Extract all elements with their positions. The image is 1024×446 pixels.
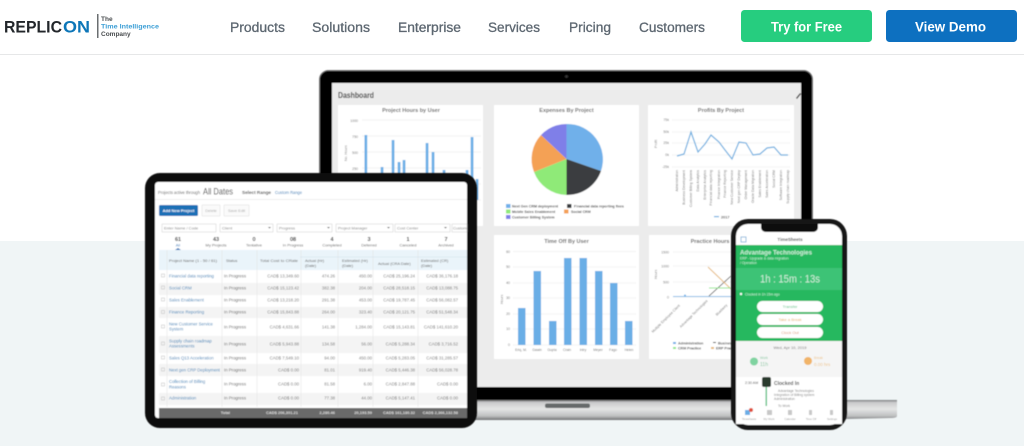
tablet status tabs: Deferred xyxy=(361,242,377,248)
project table: Total Cost to CRate xyxy=(260,258,299,263)
project table: 1,284.00 xyxy=(355,324,373,330)
phone daily summary: Wed, Apr 10, 2019 xyxy=(773,345,807,350)
panel: practice hours: Blueberry xyxy=(715,303,728,317)
panel: practice hours: CRM Practice xyxy=(678,346,701,350)
logo: ON xyxy=(63,18,90,36)
panel: profits by project: Enterprise Analytics xyxy=(703,170,707,200)
project table: Financial data reporting xyxy=(169,274,215,278)
phone daily summary: Break xyxy=(814,356,823,360)
project table: 291.38 xyxy=(322,298,336,302)
project table: 323.40 xyxy=(359,310,373,314)
tablet toolbar buttons xyxy=(159,205,249,216)
panel: practice hours: 500 xyxy=(663,280,669,284)
project table: 382.38 xyxy=(322,286,336,290)
project table: CAD$ 2,847.88 xyxy=(386,382,416,386)
laptop base xyxy=(440,400,897,420)
project table: CAD$ 0.00 xyxy=(437,382,459,386)
pie legend: Mobile Sales Enablement xyxy=(512,210,556,214)
project table: CAD$ 13,349.60 xyxy=(267,274,300,278)
project table: Estimated (Hr) xyxy=(342,258,368,263)
navigation: Products xyxy=(230,20,285,35)
project table: CAD$ 15,843.88 xyxy=(267,310,300,314)
button: view demo: View Demo xyxy=(915,20,986,34)
tablet: Custom xyxy=(453,226,467,230)
project table: In Progress xyxy=(224,286,246,290)
panel: profits by project: Profits By Project xyxy=(698,108,744,114)
dashboard heading: Dashboard xyxy=(338,91,374,100)
panel: profits by project: Finance Integration xyxy=(717,170,721,199)
panel: practice hours: Administration xyxy=(678,342,703,346)
panel: time off by user: Fago xyxy=(609,348,617,352)
phone tab bar: Time Off xyxy=(806,417,817,421)
project table: CAD$ 5,147.41 xyxy=(386,396,416,400)
panel: project hours by user: 1000 xyxy=(350,119,358,123)
tablet status tabs: All xyxy=(176,242,180,248)
panel: profits by project: Customer Billing System xyxy=(689,170,693,207)
panel: practice hours: 1500 xyxy=(661,250,669,254)
project table: Actual (CRA Date) xyxy=(378,261,411,266)
tablet toolbar buttons: Save Edit xyxy=(228,208,246,213)
project table: Social CRM xyxy=(169,286,192,290)
project table: CAD$ 31,285.57 xyxy=(426,356,459,360)
project table: In Progress xyxy=(224,310,246,314)
panel: expenses by project: Expenses By Project xyxy=(539,108,594,114)
phone daily summary xyxy=(736,341,842,377)
panel: profits by project: Order Management xyxy=(744,170,748,199)
phone activity entry xyxy=(745,377,815,408)
panel: profits by project: 0k xyxy=(665,153,669,157)
project table: Actual (Hr) xyxy=(305,258,325,263)
panel: practice hours xyxy=(649,235,801,359)
panel: practice hours: Multiple Employee Client xyxy=(651,304,681,334)
panel: profits by project: Financial data reporting xyxy=(709,170,713,205)
logo: The xyxy=(101,16,113,23)
tablet status tabs: 43 xyxy=(213,237,219,243)
tablet status tabs: In Progress xyxy=(283,242,303,248)
phone tab bar: Timesheets xyxy=(742,417,757,421)
project table: CAD$ 28,518.15 xyxy=(383,286,416,290)
project table: 81.01 xyxy=(324,368,336,372)
panel: time off by user: Eriq, M. xyxy=(515,348,527,352)
tablet filters xyxy=(162,224,467,232)
project table: Administration xyxy=(169,396,197,400)
tablet status tabs: Tentative xyxy=(246,242,263,248)
phone xyxy=(731,219,847,430)
project table: CAD$ 7,549.10 xyxy=(270,356,300,360)
project table: 77.38 xyxy=(324,396,336,400)
phone activity entry: Integration of Billing system xyxy=(774,393,815,397)
panel: profits by project: Administration xyxy=(675,170,679,191)
pencil icon xyxy=(796,93,801,99)
panel: practice hours: Hours xyxy=(654,269,658,279)
panel: profits by project: Social CRM xyxy=(772,170,776,188)
panel: profits by project: New Customer Service xyxy=(730,170,734,205)
phone daily summary: Work xyxy=(760,356,768,360)
button: try for free: Try for Free xyxy=(771,20,842,34)
panel: time off by user: 60 xyxy=(506,250,510,254)
phone tab bar: Calendar xyxy=(784,417,796,421)
table total row: CAD$ 161,180.32 xyxy=(383,410,416,415)
project table: Sales Enablement xyxy=(169,298,205,302)
phone green timer panel: Advantage Technologies xyxy=(740,250,812,256)
project table: Supply chain roadmap xyxy=(169,338,212,344)
panel: time off by user: 50 xyxy=(506,265,510,269)
panel: practice hours: Business xyxy=(718,342,734,346)
phone daily summary: 11h xyxy=(760,362,768,368)
project table: 141.38 xyxy=(322,324,336,330)
tablet status tabs: 3 xyxy=(367,237,371,243)
tablet status tabs: Canceled xyxy=(400,242,416,248)
panel: time off by user: Intry xyxy=(580,348,587,352)
project table: CAD$ 0.00 xyxy=(437,396,459,400)
project table: CAD$ 141,610.20 xyxy=(424,324,459,330)
laptop lid xyxy=(320,70,812,400)
tablet: Enter Name / Code xyxy=(164,226,199,230)
project table: CAD$ 56,082.57 xyxy=(426,298,459,302)
project table: 6.00 xyxy=(364,382,373,386)
project table: 264.00 xyxy=(322,310,336,314)
panel: project hours by user: 750 xyxy=(352,135,358,139)
project table: CAD$ 36,176.18 xyxy=(426,274,459,278)
project table: Status xyxy=(226,258,237,263)
project table: 474.26 xyxy=(322,274,336,278)
project table: Estimated (CR) xyxy=(421,258,449,263)
project table: 453.00 xyxy=(359,298,373,302)
panel: time off by user: 40 xyxy=(506,281,510,285)
tablet: Client xyxy=(222,226,233,230)
project table: Project Name (1 - 50 / 61) xyxy=(169,258,218,263)
panel: project hours by user: 500 xyxy=(352,151,358,155)
logo: Company xyxy=(101,31,131,38)
panel: profits by project: Next gen CRP Deploy xyxy=(737,170,741,203)
project table: CAD$ 51,548.34 xyxy=(426,310,459,314)
navigation: Enterprise xyxy=(398,20,461,35)
panel: profits by project: Profit xyxy=(654,140,658,148)
header bar xyxy=(0,0,1024,55)
tablet: Cost Center xyxy=(397,226,419,230)
tablet xyxy=(145,173,477,428)
panel: profits by project: Supply chain roadmap xyxy=(786,170,790,204)
panel: profits by project: 25k xyxy=(663,141,669,145)
project table: CAD$ 5,446.38 xyxy=(386,368,416,372)
tablet status tabs: 0 xyxy=(252,237,256,243)
panel: practice hours: 0 xyxy=(667,296,669,300)
project table xyxy=(159,250,467,418)
project table: 44.00 xyxy=(361,396,373,400)
tablet status tabs xyxy=(175,237,454,250)
panel: time off by user: Hours xyxy=(500,294,504,304)
panel: profits by project: Finance Reporting xyxy=(723,170,727,198)
project table: 56.00 xyxy=(361,342,373,346)
panel: project hours by user: No. Hours xyxy=(344,145,348,161)
tablet: Progress xyxy=(279,226,295,230)
project table: In Progress xyxy=(224,356,246,360)
project table: (Date) xyxy=(342,263,354,268)
project table: Finance Reporting xyxy=(169,310,205,314)
project table: 134.58 xyxy=(322,342,336,346)
panel: profits by project: Sales Acceleration xyxy=(765,170,769,198)
panel: time off by user: Gupta xyxy=(547,348,557,352)
project table: CAD$ 0.00 xyxy=(278,368,300,372)
phone green timer panel: Transfer xyxy=(783,304,798,309)
tablet status tabs: 61 xyxy=(175,237,181,243)
project table: Collection of Billing xyxy=(169,379,206,384)
phone tab bar xyxy=(736,408,842,424)
panel: time off by user: 20 xyxy=(506,312,510,316)
tablet status tabs: My Projects xyxy=(206,242,226,248)
panel: practice hours: Advantage Technologies xyxy=(679,299,709,329)
laptop xyxy=(320,70,897,420)
project table: CAD$ 15,143.81 xyxy=(383,324,416,330)
phone activity entry: Administration xyxy=(774,397,795,401)
project table: 81.58 xyxy=(324,382,336,386)
tablet heading: Custom Range xyxy=(275,190,302,195)
project table: CAD$ 5,288.34 xyxy=(386,342,416,346)
project table: 450.00 xyxy=(359,274,373,278)
project table: CAD$ 15,123.42 xyxy=(267,286,300,290)
table total row: CAD$ 206,301.21 xyxy=(266,410,299,415)
navigation xyxy=(230,20,705,35)
table total row: 2,280.46 xyxy=(319,410,336,415)
phone green timer panel: / Operation xyxy=(740,261,757,265)
logo xyxy=(4,14,159,38)
project table: 94.00 xyxy=(324,356,336,360)
panel: profits by project xyxy=(648,105,794,226)
phone green timer panel: Take a Break xyxy=(778,317,802,322)
panel: practice hours: 1000 xyxy=(661,264,669,268)
panel: profits by project: -25k xyxy=(662,165,669,169)
project table: System xyxy=(169,326,184,332)
project table: CAD$ 25,196.24 xyxy=(383,274,416,278)
phone daily summary: 0.00 hrs xyxy=(814,362,831,367)
panel: project hours by user: 250 xyxy=(352,167,358,171)
pie legend xyxy=(506,204,624,220)
project table: CAD$ 4,631.66 xyxy=(270,324,300,330)
logo: REPLIC xyxy=(4,18,62,36)
panel: practice hours: ERP Prac xyxy=(716,346,732,350)
tablet toolbar buttons: Add New Project xyxy=(163,208,195,213)
panel: time off by user: 30 xyxy=(506,296,510,300)
phone activity entry: 2:30 AM xyxy=(745,381,758,385)
panel: time off by user: Gawin xyxy=(532,348,542,352)
phone activity entry: To Work xyxy=(778,404,790,408)
project table: CAD$ 5,943.88 xyxy=(270,342,300,346)
project table: 204.00 xyxy=(359,286,373,290)
project table: In Progress xyxy=(224,298,246,302)
panel: expenses by project xyxy=(494,105,639,226)
panel: time off by user: Crain xyxy=(563,348,571,352)
project table: In Progress xyxy=(224,274,246,278)
table total row: Total xyxy=(221,410,230,415)
phone header: TimeSheets xyxy=(777,237,803,242)
phone activity entry: Clocked In xyxy=(774,381,799,387)
project table: CAD$ 3,716.52 xyxy=(429,342,459,346)
pie legend: Next Gen CRM deployment xyxy=(512,204,559,208)
phone green timer panel: Clocked in 1h 15m ago xyxy=(745,292,780,296)
page background xyxy=(0,241,1024,446)
navigation: Customers xyxy=(639,20,705,35)
project table: In Progress xyxy=(224,324,246,330)
tablet status tabs: 08 xyxy=(290,237,296,243)
panel: time off by user: Time Off By User xyxy=(544,239,590,245)
project table: CAD$ 56,028.78 xyxy=(426,368,459,372)
tablet heading: Select Range xyxy=(242,190,272,195)
tablet heading xyxy=(158,186,302,198)
project table: CAD$ 13,218.20 xyxy=(267,298,300,302)
panel: practice hours: Practice Hours xyxy=(691,239,729,245)
tablet heading: Projects active through xyxy=(158,190,200,195)
table total row: CAD$ 2,366,132.58 xyxy=(423,410,459,415)
navigation: Solutions xyxy=(312,20,370,35)
project table: Assessments xyxy=(169,344,195,348)
project table: CAD$ 13,088.75 xyxy=(426,286,459,290)
line chart xyxy=(677,132,788,159)
phone tab bar: Settings xyxy=(827,417,838,421)
phone green timer panel: 1h : 15m : 13s xyxy=(760,274,820,286)
tablet status tabs: Archived xyxy=(438,242,454,248)
tablet status tabs: Completed xyxy=(322,242,342,248)
project table: In Progress xyxy=(224,342,246,346)
panel: profits by project: Sales Enablement xyxy=(758,170,762,198)
panel: profits by project: 2017 xyxy=(721,216,729,220)
panel: profits by project: Oracle Data Migration xyxy=(751,170,755,203)
project table: CAD$ 0.00 xyxy=(278,396,300,400)
project table: 919.40 xyxy=(359,368,373,372)
panel: profits by project: Data Analytics xyxy=(696,170,700,191)
panel: profits by project: Business Development xyxy=(682,170,686,205)
project table: CAD$ 0.00 xyxy=(278,382,300,386)
panel: project hours by user: Project Hours by User xyxy=(382,108,441,114)
project table: Sales Q13 Acceleration xyxy=(169,356,214,360)
tablet status tabs: 7 xyxy=(444,237,448,243)
project table: CAD$ 19,787.45 xyxy=(383,298,416,302)
pie chart xyxy=(532,124,603,195)
navigation: Services xyxy=(488,20,540,35)
panel: time off by user xyxy=(494,235,639,359)
phone tab bar: My Work xyxy=(764,417,775,421)
project table: 450.00 xyxy=(359,356,373,360)
pie legend: Social CRM xyxy=(571,210,591,214)
phone green timer panel xyxy=(736,245,842,341)
tablet status tabs: 4 xyxy=(330,237,334,243)
panel: profits by project: Software Integration xyxy=(779,170,783,200)
tablet toolbar buttons: Delete xyxy=(205,208,218,213)
pie legend: Financial data reporting fixes xyxy=(574,204,624,208)
phone activity entry: Advantage Technologies xyxy=(778,389,814,393)
panel: profits by project: 75k xyxy=(663,118,669,122)
project table: Reasons xyxy=(169,384,186,390)
table total row: 20,193.59 xyxy=(354,410,373,415)
project table: In Progress xyxy=(224,396,246,400)
panel: time off by user: 0 xyxy=(508,343,510,347)
phone green timer panel: Clock Out xyxy=(781,330,800,335)
logo: Time Intelligence xyxy=(101,24,159,30)
panel: time off by user: 10 xyxy=(506,327,510,331)
project table: (Date) xyxy=(421,263,433,268)
project table: Next gen CRP Deployment xyxy=(169,368,221,372)
button: try for free xyxy=(741,10,872,42)
navigation: Pricing xyxy=(569,20,611,35)
project table: CAD$ 5,283.05 xyxy=(386,356,416,360)
tablet heading: All Dates xyxy=(203,186,233,198)
panel: project hours by user xyxy=(338,105,483,226)
panel: time off by user: Meyer xyxy=(593,348,604,352)
panel: time off by user: Helen xyxy=(625,348,634,352)
tablet status tabs: 1 xyxy=(406,237,410,243)
panel: profits by project: 50k xyxy=(663,130,669,134)
button: view demo xyxy=(886,10,1017,42)
project table: In Progress xyxy=(224,368,246,372)
project table: In Progress xyxy=(224,382,246,386)
project table: CAD$ 20,121.75 xyxy=(383,310,416,314)
table total row xyxy=(159,408,467,418)
phone green timer panel: ERP - Upgrade & data migration xyxy=(740,256,789,260)
pie legend: Customer Billing System xyxy=(512,216,555,220)
project table: (Date) xyxy=(305,263,317,268)
tablet: Project Manager xyxy=(338,226,368,230)
project table: New Customer Service xyxy=(169,322,214,326)
